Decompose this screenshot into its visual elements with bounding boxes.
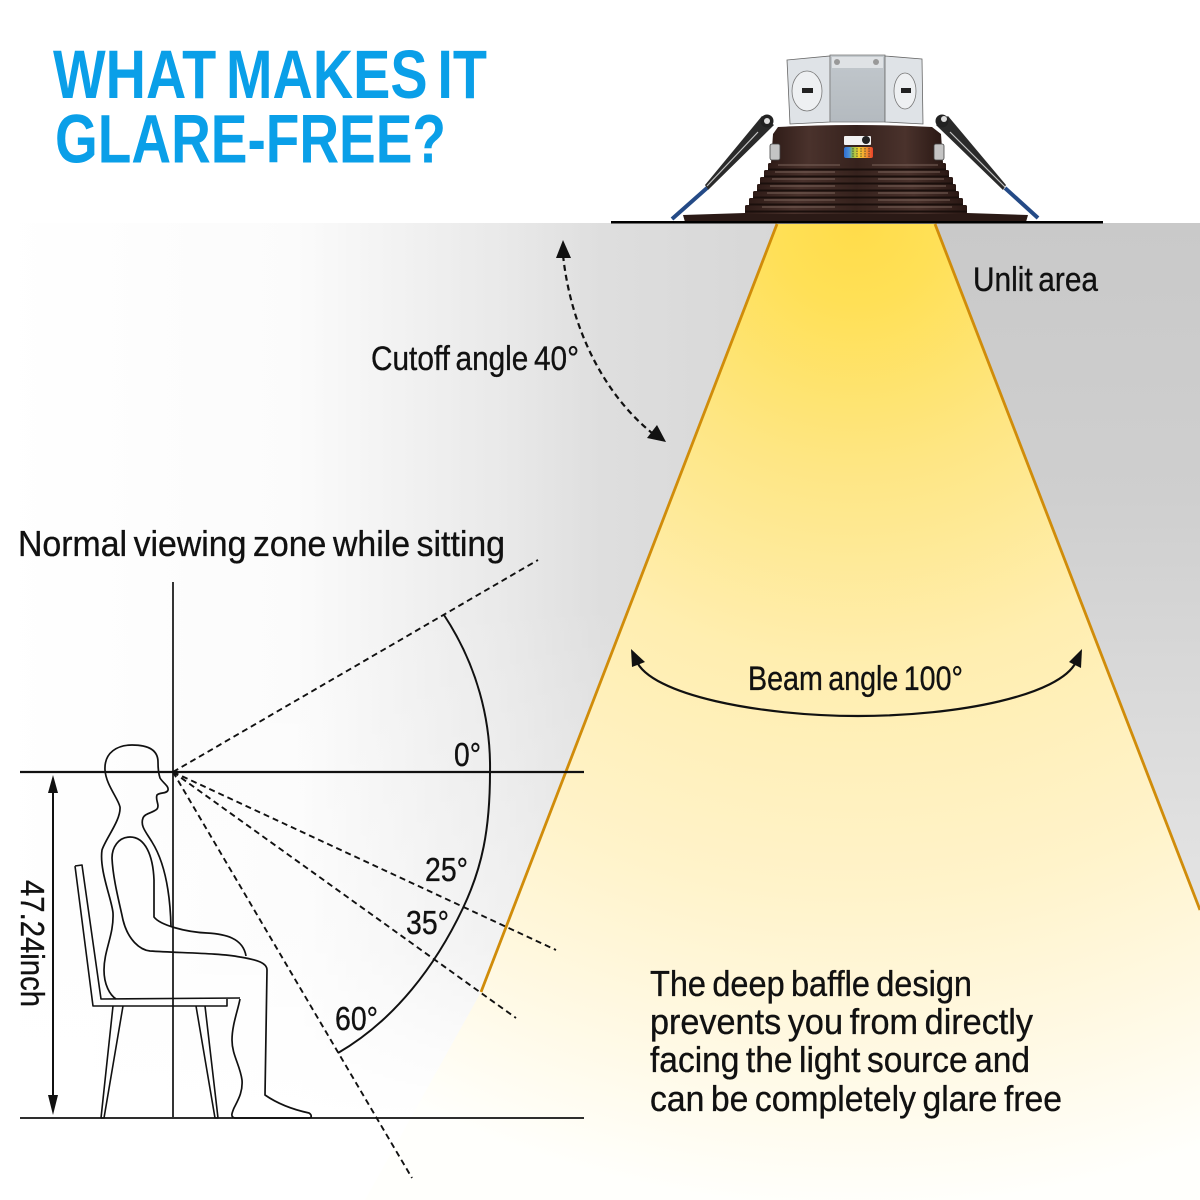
angle labels	[335, 736, 481, 1037]
title	[53, 36, 487, 178]
label: cutoff angle: Cutoff angle 40°	[371, 340, 579, 378]
arrow: cutoff angle dashed arc	[556, 240, 666, 442]
description text block	[650, 963, 1062, 1119]
downlight fixture	[672, 55, 1038, 222]
height label: 47.24inch	[14, 880, 51, 1007]
label: unlit area: Unlit area	[973, 261, 1098, 299]
ceiling line	[611, 221, 1103, 224]
angle labels: 25°	[425, 851, 468, 888]
angle labels: 35°	[406, 904, 449, 941]
angle labels: 60°	[335, 1000, 378, 1037]
arrow: beam angle arc	[631, 649, 1082, 716]
description text block: The deep baffle design	[650, 963, 972, 1004]
label: beam angle: Beam angle 100°	[748, 660, 963, 698]
dashed sight lines	[173, 560, 556, 1178]
right spring clip	[936, 114, 1038, 218]
chair outline	[75, 865, 240, 1118]
light beam cone	[365, 224, 1200, 1200]
stepped baffle	[745, 163, 967, 214]
description text block: prevents you from directly	[650, 1001, 1033, 1042]
left spring clip	[672, 114, 774, 219]
reference lines	[20, 582, 584, 1118]
junction box	[787, 55, 923, 124]
heading: viewing zone: Normal viewing zone while sitting	[18, 523, 505, 564]
housing collar	[771, 125, 943, 163]
title: GLARE-FREE?	[55, 100, 446, 178]
description text block: facing the light source and	[650, 1039, 1030, 1080]
title: WHAT MAKES IT	[53, 36, 487, 113]
description text block: can be completely glare free	[650, 1078, 1062, 1119]
viewing arc	[338, 615, 490, 1053]
viewing zone diagram	[14, 560, 584, 1178]
height arrow	[48, 775, 58, 1115]
mounting brackets	[770, 144, 944, 160]
angle labels: 0°	[454, 736, 481, 773]
trim ring	[683, 213, 1028, 222]
seated person outline	[102, 745, 311, 1118]
switch label	[844, 136, 873, 158]
